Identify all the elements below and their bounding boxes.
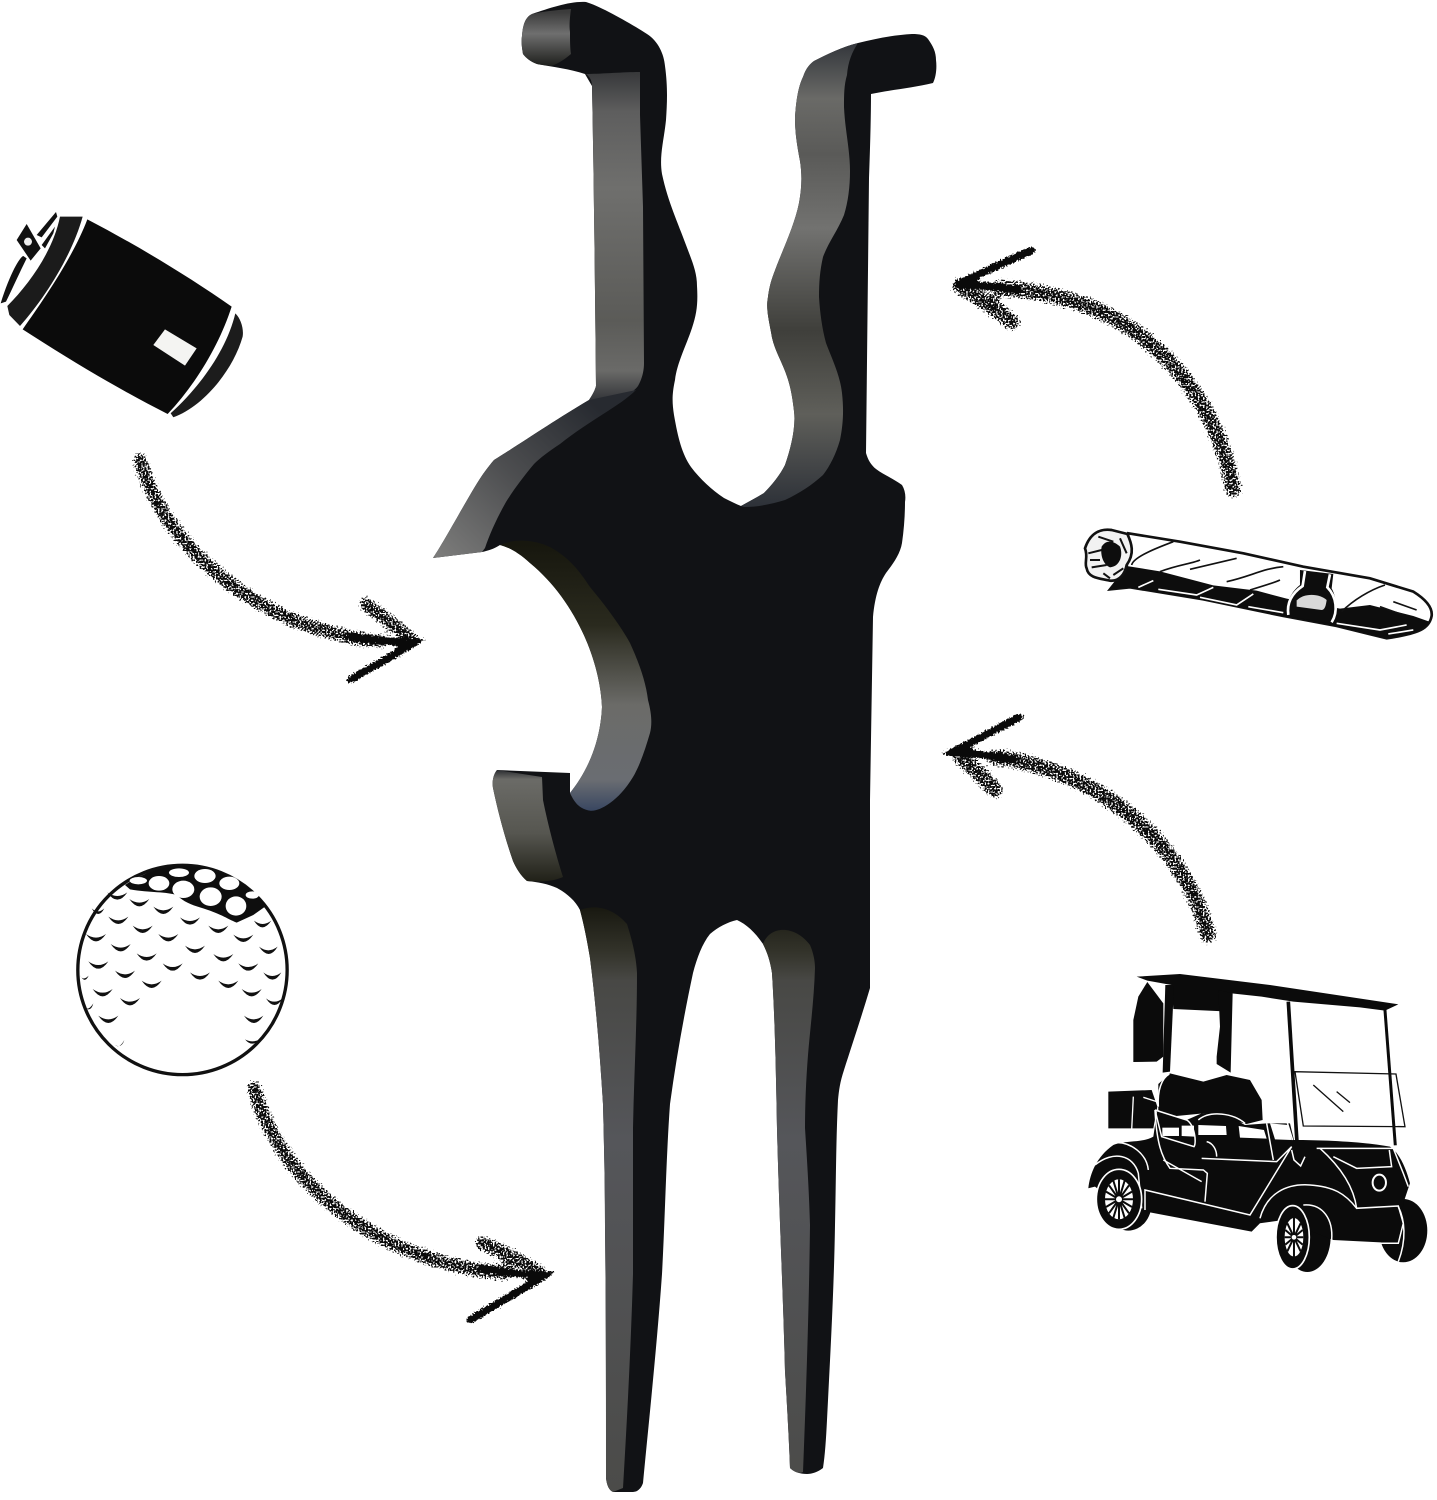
cigar tuck [1085, 530, 1132, 581]
knob highlight [522, 9, 571, 66]
wrapper dark band [1110, 566, 1429, 638]
cart tires [1105, 1176, 1427, 1272]
ball outline [78, 865, 287, 1075]
arrow: cigar to cigar holder [955, 250, 1233, 490]
dark dimple band [125, 866, 266, 923]
dimple shadows [80, 892, 283, 1046]
wrapper creases [1132, 542, 1417, 615]
icon: cigar [1085, 530, 1432, 638]
cart seat back [1158, 1073, 1263, 1124]
wrapper highlights [1138, 581, 1413, 634]
cart front wheel [1276, 1206, 1309, 1269]
right prong face [741, 43, 858, 507]
cigar wrapper [1110, 533, 1432, 638]
icon: golf ball [78, 865, 287, 1075]
cart windshield [1295, 1072, 1405, 1127]
notch tab face [493, 770, 563, 882]
right tine face [763, 930, 815, 1473]
dimple highlights [130, 868, 259, 916]
cart posts [1163, 985, 1233, 1073]
cigar band opener [1286, 570, 1336, 623]
can top band [7, 217, 83, 326]
can bottom band [171, 313, 243, 417]
cart rear curtain [1133, 982, 1163, 1062]
cart roof [1137, 974, 1398, 1012]
can body [23, 219, 232, 414]
left prong face [586, 72, 644, 404]
cart white trim lines [1095, 1074, 1408, 1262]
icon: golf cart [1088, 974, 1427, 1272]
cart seat openings [1162, 1123, 1292, 1140]
tool silhouette [433, 2, 936, 1492]
icon: beer can [1, 212, 243, 417]
bottle opener arc face [500, 541, 651, 811]
hook blade face [433, 390, 636, 558]
cart cooler [1108, 1090, 1157, 1130]
can label [153, 329, 197, 366]
cart body [1088, 1110, 1410, 1243]
cart rear wheel [1096, 1169, 1142, 1229]
arrow: golf ball to tines [254, 1088, 545, 1320]
can rim and pull tab [1, 212, 57, 303]
divot tool [433, 2, 936, 1492]
cart headlight [1373, 1175, 1386, 1191]
arrow: golf cart to clip [953, 717, 1208, 935]
left tine face [580, 907, 637, 1492]
arrow: can to bottle opener [140, 460, 415, 680]
